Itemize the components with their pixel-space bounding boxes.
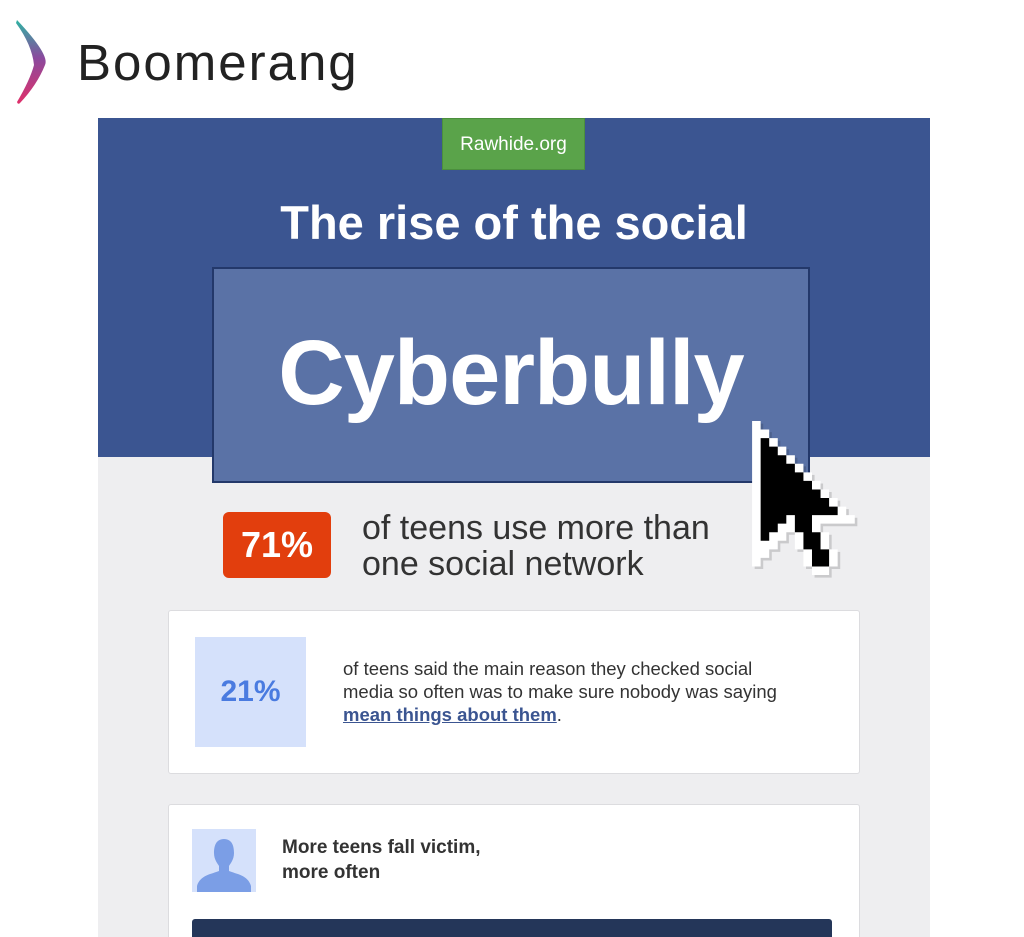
stat square 21%: [195, 637, 306, 747]
title box: Cyberbully: [212, 267, 810, 483]
heading: More teens fall victim,: [282, 837, 481, 858]
title: The rise of the social: [280, 196, 748, 249]
card: victims: [168, 804, 860, 937]
icon: cursor: [752, 421, 858, 578]
stat square 21%: 21%: [220, 675, 281, 708]
logo: boomerang: [16, 20, 359, 104]
main infographic panel: [98, 118, 930, 937]
stat badge 71%: 71%: [241, 524, 313, 565]
heading: [282, 837, 481, 883]
blue header band: [98, 118, 930, 457]
stat text: one social network: [362, 545, 644, 583]
card: 21% stat: [168, 610, 860, 774]
heading: more often: [282, 862, 380, 883]
source tag: [442, 118, 585, 170]
stat text: [362, 509, 710, 583]
icon: boomerang: [16, 20, 46, 104]
stat badge 71%: [223, 512, 331, 578]
stat text: of teens use more than: [362, 509, 710, 547]
title box: Cyberbully: Cyberbully: [278, 322, 744, 424]
stat description: of teens said the main reason they checked social media so often was to make sure nobody was saying mean things about them.: [343, 658, 777, 725]
icon: avatar: [192, 829, 256, 892]
dark bar: [192, 919, 832, 937]
wordmark: Boomerang: [77, 34, 359, 91]
source tag: Rawhide.org: [460, 134, 567, 155]
